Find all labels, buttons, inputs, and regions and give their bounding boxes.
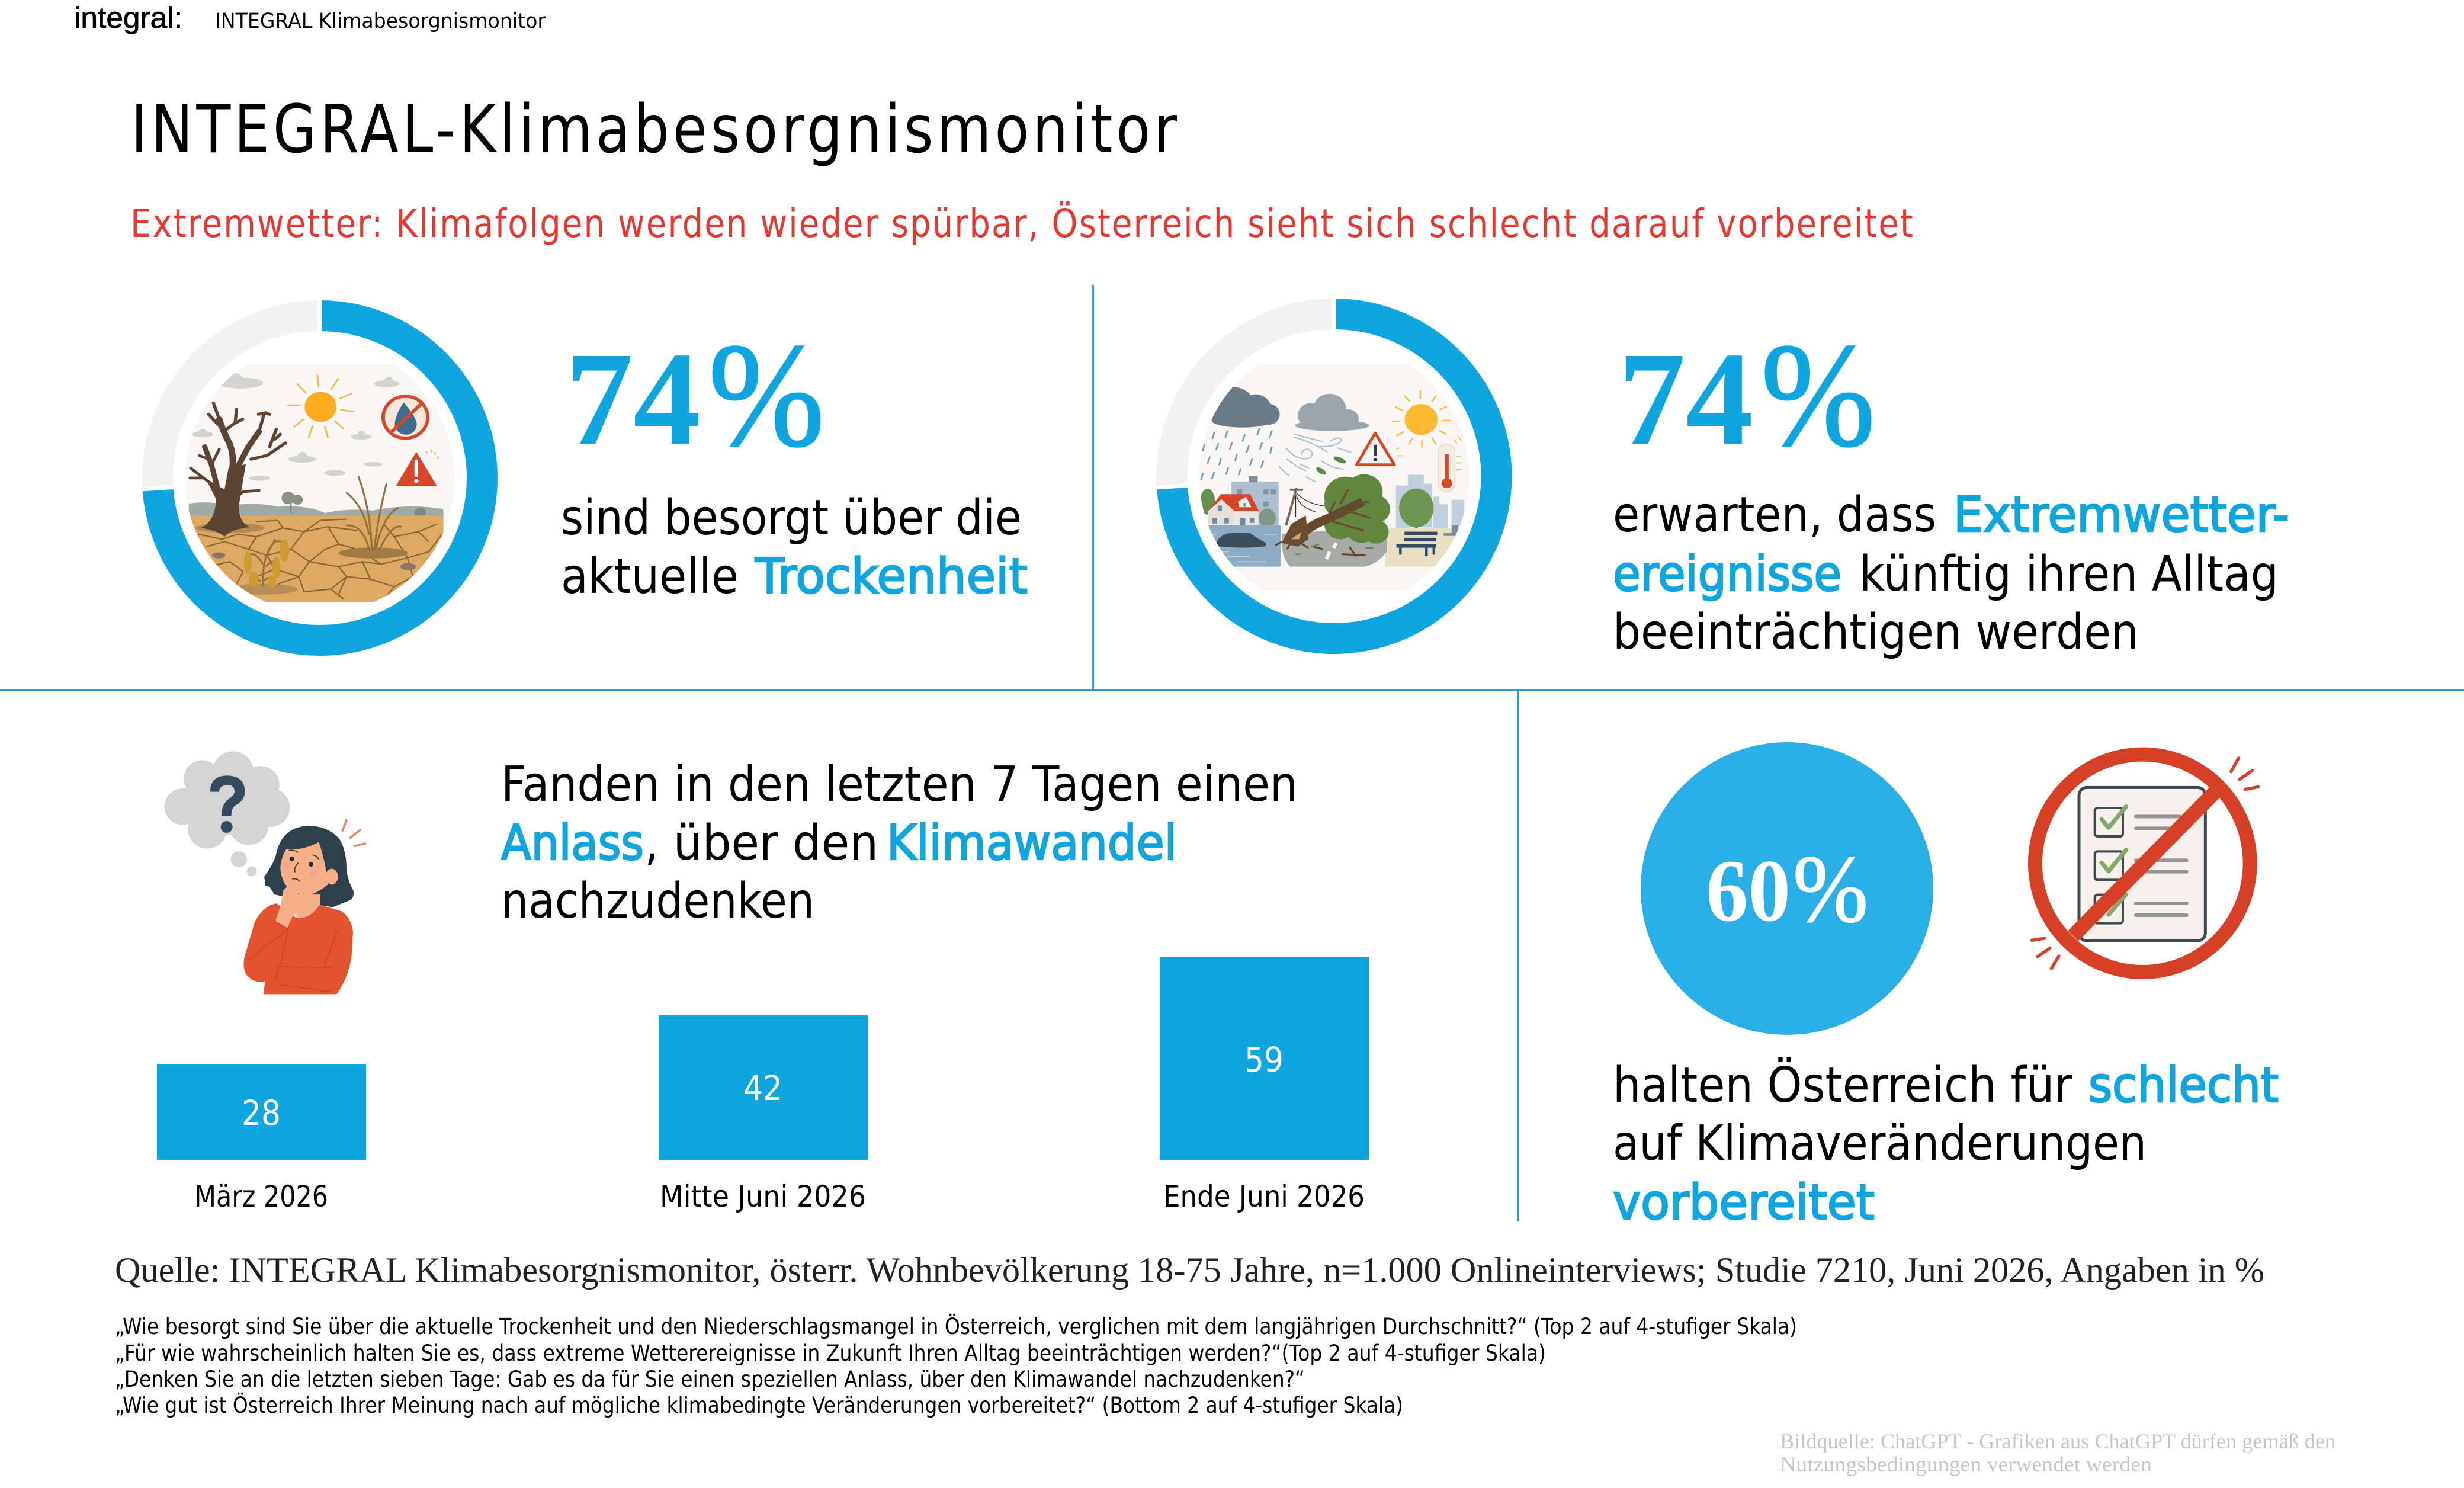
stat: 74 percent: 74 <box>1618 325 1753 473</box>
panel: extreme weather <box>1151 293 2289 660</box>
logo: integral: <box>74 1 182 34</box>
image credit <box>1780 1429 2335 1476</box>
stat: 74 percent: % <box>708 313 824 477</box>
question text: , über den <box>644 815 878 871</box>
divider: upper vertical <box>1092 285 1094 690</box>
title: INTEGRAL-Klimabesorgnismonitor <box>131 91 1180 168</box>
statement text: halten Österreich für <box>1613 1057 2072 1114</box>
statement text: auf Klimaveränderungen <box>1613 1115 2147 1172</box>
icon: prohibited checklist <box>2032 755 2258 972</box>
divider: horizontal <box>0 689 2464 691</box>
statement text: sind besorgt über die <box>561 490 1022 546</box>
donut chart: 74 percent extreme weather <box>1151 293 1496 639</box>
stat circle: 60 percent: 60 <box>1706 842 1791 940</box>
question wording: „Für wie wahrscheinlich halten Sie es, dass extreme Wetterereignisse in Zukunft Ihren Alltag beeinträchtigen werden?“(Top 2 auf 4-stufiger Skala) <box>115 1341 1546 1366</box>
bar: Ende Juni 2026: 59 <box>1244 1040 1284 1080</box>
question text: Fanden in den letzten 7 Tagen einen <box>501 756 1298 813</box>
panel: reason to think about climate change <box>126 745 1369 1214</box>
bar: Ende Juni 2026 <box>1160 957 1369 1214</box>
question wording: „Denken Sie an die letzten sieben Tage: Gab es da für Sie einen speziellen Anlass, über den Klimawandel nachzudenken?“ <box>115 1367 1305 1392</box>
stat circle: 60 percent <box>1641 742 1933 1035</box>
statement text <box>1613 487 2289 660</box>
question text: nachzudenken <box>501 873 814 929</box>
bar: Mitte Juni 2026: Mitte Juni 2026 <box>660 1179 866 1214</box>
stat: 74 percent: % <box>1761 313 1875 477</box>
statement text: ereignisse <box>1613 546 1841 602</box>
bar: März 2026: März 2026 <box>194 1179 328 1214</box>
question text: Klimawandel <box>887 815 1177 871</box>
stat: 74 percent <box>1618 313 1875 477</box>
statement text: erwarten, dass <box>1613 487 1936 543</box>
bar: März 2026: 28 <box>242 1093 281 1133</box>
question wording: „Wie besorgt sind Sie über die aktuelle Trockenheit und den Niederschlagsmangel in Österreich, verglichen mit dem langjährigen Durchschnitt?“ (Top 2 auf 4-stufiger Skala) <box>115 1314 1797 1339</box>
statement text: aktuelle <box>561 549 739 605</box>
header label: INTEGRAL Klimabesorgnismonitor <box>215 9 546 33</box>
panel: preparedness <box>1613 742 2279 1231</box>
image credit: Nutzungsbedingungen verwendet werden <box>1780 1452 2152 1476</box>
stat: 74 percent <box>566 313 824 477</box>
image credit: Bildquelle: ChatGPT - Grafiken aus ChatGPT dürfen gemäß den <box>1780 1429 2335 1453</box>
subtitle: Extremwetter: Klimafolgen werden wieder spürbar, Österreich sieht sich schlecht darauf vorbereitet <box>130 201 1914 246</box>
question wording: „Wie gut ist Österreich Ihrer Meinung nach auf mögliche klimabedingte Veränderungen vorbereitet?“ (Bottom 2 auf 4-stufiger Skala) <box>115 1393 1403 1418</box>
question wording <box>115 1314 1797 1418</box>
statement text: beeinträchtigen werden <box>1613 604 2139 660</box>
divider: lower vertical <box>1517 691 1519 1221</box>
question text: Anlass <box>501 815 644 871</box>
statement text: schlecht <box>2088 1057 2279 1114</box>
bar: März 2026 <box>157 1064 366 1214</box>
question text <box>501 756 1298 929</box>
source line: Quelle: INTEGRAL Klimabesorgnismonitor, österr. Wohnbevölkerung 18-75 Jahre, n=1.000 Onlineinterviews; Studie 7210, Juni 2026, Angaben in % <box>115 1250 2264 1290</box>
bar: Ende Juni 2026: Ende Juni 2026 <box>1163 1179 1365 1214</box>
stat circle: 60 percent: % <box>1793 836 1868 942</box>
icon: thinking woman <box>126 745 405 995</box>
statement text <box>561 490 1028 605</box>
stat: 74 percent: 74 <box>566 325 701 473</box>
bar: Mitte Juni 2026 <box>659 1015 868 1214</box>
panel: drought <box>137 294 1028 640</box>
statement text: Trockenheit <box>755 549 1028 605</box>
bar chart <box>157 957 1369 1214</box>
bar: Mitte Juni 2026: 42 <box>743 1068 782 1108</box>
donut chart: 74 percent drought <box>137 294 482 640</box>
icon: drought illustration <box>185 364 455 602</box>
statement text: künftig ihren Alltag <box>1859 546 2279 602</box>
icon: extreme weather illustration <box>1199 364 1469 591</box>
statement text: Extremwetter- <box>1953 487 2289 543</box>
statement text: vorbereitet <box>1613 1175 1875 1231</box>
statement text <box>1613 1057 2279 1231</box>
